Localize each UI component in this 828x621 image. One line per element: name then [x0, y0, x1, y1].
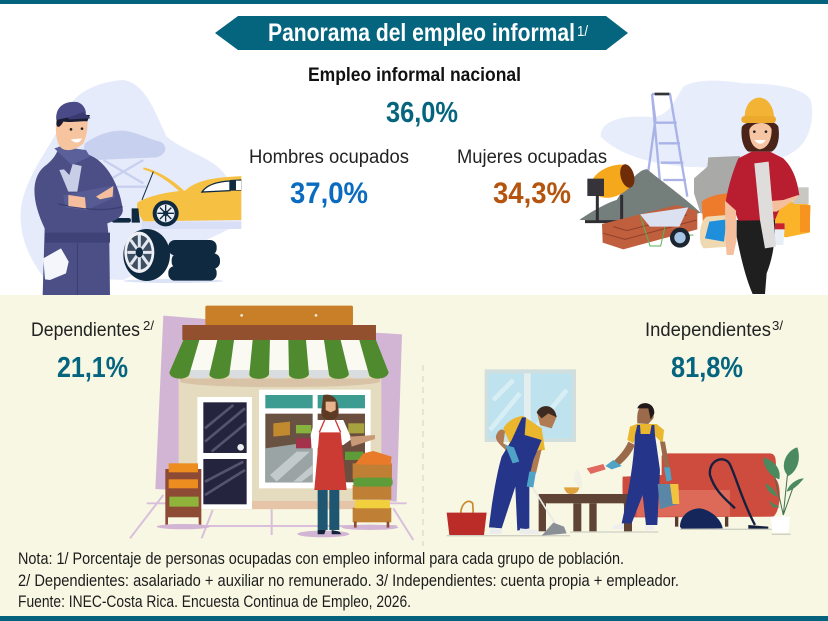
label: employed men: Hombres ocupados	[249, 147, 409, 168]
awning	[169, 325, 389, 387]
illustration: grocery shop and shopkeeper	[130, 306, 413, 540]
background blob	[601, 81, 812, 167]
label: dependents: Dependientes	[31, 320, 140, 341]
value: national rate: 36,0%	[386, 97, 458, 129]
shop wall	[179, 375, 381, 509]
label: employed women: Mujeres ocupadas	[457, 147, 607, 168]
background blob	[21, 80, 241, 280]
woman dusting	[587, 403, 679, 530]
vacuum cleaner	[680, 459, 768, 529]
concrete blocks	[694, 156, 743, 213]
bricks and orange bag	[702, 193, 730, 230]
heading: national informal employment: Empleo informal nacional	[308, 65, 521, 86]
illustration: cleaning workers in living room	[447, 369, 804, 536]
red basket	[447, 501, 487, 535]
floor lines	[130, 495, 413, 540]
gravel pile	[579, 169, 701, 222]
value: women rate: 34,3%	[493, 177, 571, 210]
floor lines	[447, 529, 791, 536]
shop window	[259, 390, 371, 488]
label: independents: 3/	[772, 318, 783, 333]
footnote text block: Fuente: INEC-Costa Rica. Encuesta Continua de Empleo, 2026.	[18, 592, 411, 611]
footnote text block	[18, 549, 679, 611]
shopkeeper	[297, 395, 375, 537]
mechanic	[34, 102, 123, 295]
plant	[763, 447, 804, 533]
illustration: construction worker and materials	[579, 81, 812, 294]
man mopping	[489, 406, 567, 536]
coffee table with bowl and bottle	[539, 469, 633, 531]
value: dependents rate: 21,1%	[57, 352, 128, 384]
illustration: mechanic and car	[21, 80, 243, 295]
title banner: Panorama del empleo informal	[268, 19, 575, 47]
yellow car	[137, 167, 243, 226]
value: independents rate: 81,8%	[671, 352, 743, 384]
window	[485, 369, 576, 442]
paint buckets	[774, 200, 811, 237]
wheelbarrow	[640, 207, 693, 248]
title banner: 1/	[577, 23, 589, 40]
cement bag	[700, 215, 730, 248]
floor	[142, 222, 241, 229]
car on lift silhouette	[84, 131, 165, 187]
label: independents: Independientes	[645, 320, 771, 341]
value: men rate: 37,0%	[290, 177, 368, 210]
tire stack	[123, 229, 223, 283]
purple wall backdrop	[155, 316, 402, 502]
footnote text block: 2/ Dependientes: asalariado + auxiliar no remunerado. 3/ Independientes: cuenta propia + empleador.	[18, 571, 679, 590]
label: dependents: 2/	[143, 318, 154, 333]
ladder	[642, 94, 687, 220]
lumber stack	[602, 205, 697, 249]
vegetable crates	[342, 451, 398, 530]
footnote text block: Nota: 1/ Porcentaje de personas ocupadas con empleo informal para cada grupo de población.	[18, 549, 624, 568]
crate stand with fruit	[157, 463, 210, 529]
door	[197, 397, 252, 509]
sofa	[622, 453, 780, 527]
cement mixer	[585, 163, 637, 222]
worker	[725, 98, 799, 294]
wooden sign	[205, 306, 353, 326]
jack and tools	[132, 208, 140, 223]
